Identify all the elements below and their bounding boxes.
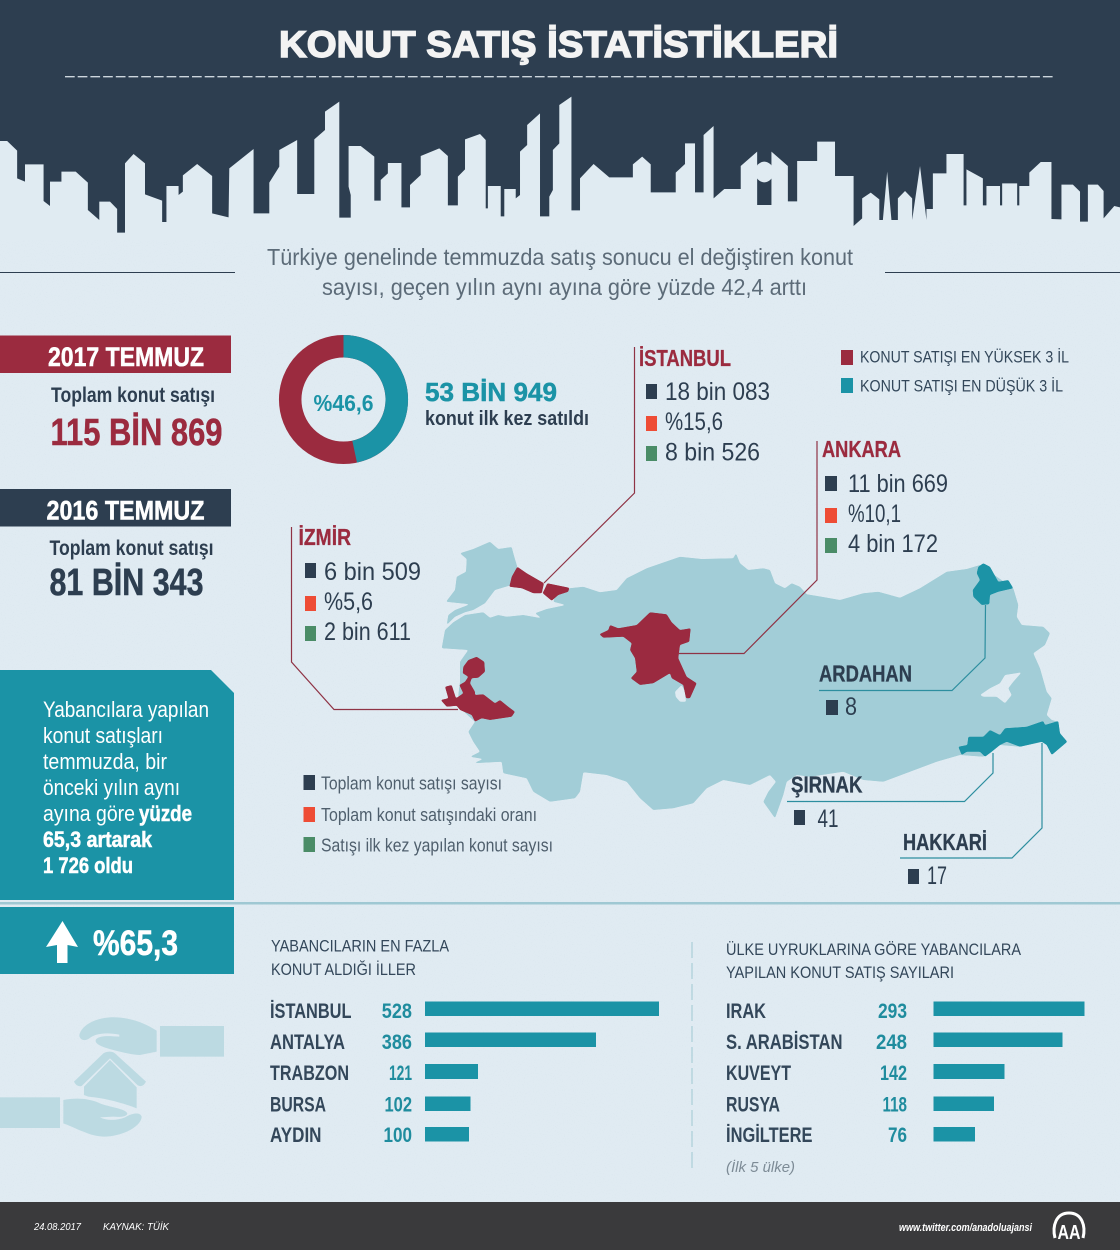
panel: 2017 temmuz [0, 336, 231, 454]
chart: countries [726, 940, 1084, 1176]
donut chart: %46,6 [314, 390, 374, 416]
panel: foreign sales text: temmuzda, bir [43, 749, 167, 774]
donut chart [290, 346, 397, 453]
chart: provinces: ANTALYA [270, 1031, 345, 1054]
chart: provinces: AYDIN [270, 1124, 322, 1147]
callout: istanbul: İSTANBUL [639, 345, 731, 371]
chart: provinces: 121 [389, 1062, 412, 1085]
chart: countries: İNGİLTERE [726, 1124, 812, 1147]
chart: countries: RUSYA [726, 1094, 780, 1116]
province: istanbul [509, 567, 569, 601]
panel: percent increase: %65,3 [93, 924, 178, 963]
chart: countries: (İlk 5 ülke) [726, 1159, 795, 1176]
callout: ardahan [819, 605, 986, 721]
chart: provinces: 386 [382, 1031, 412, 1054]
panel: 2016 temmuz [0, 489, 231, 604]
callout: izmir: %5,6 [324, 588, 373, 616]
panel: foreign sales text [0, 670, 234, 900]
legend: statistics keys [304, 774, 553, 856]
chart: provinces: İSTANBUL [270, 1000, 352, 1023]
legend: highest and lowest provinces: KONUT SATIŞI EN DÜŞÜK 3 İL [860, 376, 1063, 396]
chart: provinces: 100 [384, 1124, 412, 1147]
callout: istanbul: 18 bin 083 [665, 378, 770, 406]
first-time sales text: konut ilk kez satıldı [425, 408, 589, 430]
chart: countries: 248 [876, 1031, 907, 1054]
callout: hakkari: 17 [927, 862, 947, 890]
intro text [267, 244, 854, 300]
chart: provinces: TRABZON [270, 1062, 349, 1085]
title: KONUT SATIŞ İSTATİSTİKLERİ [279, 24, 838, 65]
chart: provinces [270, 936, 659, 1147]
first-time sales text [425, 377, 589, 430]
province: sirnak and hakkari [958, 721, 1067, 757]
chart: countries: S. ARABİSTAN [726, 1031, 842, 1054]
chart: countries: IRAK [726, 1000, 766, 1023]
chart: countries: 76 [888, 1124, 907, 1147]
panel: foreign sales text: 65,3 artarak [43, 827, 153, 852]
legend: statistics keys: Satışı ilk kez yapılan konut sayısı [321, 836, 553, 856]
callout: sirnak: ŞIRNAK [791, 772, 863, 798]
chart: countries: ÜLKE UYRUKLARINA GÖRE YABANCILARA [726, 940, 1022, 959]
callout: istanbul: 8 bin 526 [665, 438, 760, 466]
callout: hakkari: HAKKARİ [903, 829, 987, 855]
chart: countries: KUVEYT [726, 1062, 791, 1085]
map of Turkey [441, 542, 1067, 818]
panel: foreign sales text: önceki yılın aynı [43, 775, 180, 800]
callout: ankara: %10,1 [848, 500, 901, 528]
footer: KAYNAK: TÜİK [103, 1221, 170, 1233]
footer [0, 1202, 1120, 1250]
icon: AA logo [1054, 1213, 1084, 1244]
panel: 2016 temmuz: 81 BİN 343 [50, 562, 204, 604]
panel: foreign sales text: ayına göre [43, 801, 135, 826]
panel: foreign sales text: yüzde [139, 801, 192, 826]
chart: provinces: 528 [382, 1000, 412, 1023]
icon: up arrow [46, 921, 78, 963]
chart: countries: 142 [880, 1062, 907, 1085]
footer: www.twitter.com/anadoluajansi [899, 1222, 1033, 1234]
legend: statistics keys: Toplam konut satışındaki oranı [321, 805, 537, 825]
chart: countries: 293 [878, 1000, 907, 1023]
footer: 24.08.2017 [33, 1222, 81, 1233]
icon: AA logo: AA [1058, 1222, 1080, 1244]
panel: 2016 temmuz: Toplam konut satışı [50, 537, 214, 560]
chart: provinces: YABANCILARIN EN FAZLA [271, 936, 450, 956]
panel: 2017 temmuz: Toplam konut satışı [51, 384, 215, 407]
province: ankara [599, 612, 697, 698]
panel: 2017 temmuz: 2017 TEMMUZ [48, 342, 204, 372]
chart: provinces: 102 [384, 1094, 412, 1116]
callout: izmir [292, 524, 458, 710]
legend: highest and lowest provinces: KONUT SATIŞI EN YÜKSEK 3 İL [860, 348, 1069, 366]
chart: countries: 118 [882, 1094, 907, 1116]
header skyline band [0, 0, 1120, 240]
panel: foreign sales text: konut satışları [43, 723, 163, 748]
legend: highest and lowest provinces [841, 348, 1069, 396]
panel: foreign sales text: Yabancılara yapılan [43, 697, 209, 722]
chart: provinces: KONUT ALDIĞI İLLER [271, 960, 416, 979]
panel: percent increase [0, 907, 234, 974]
panel: foreign sales text: 1 726 oldu [43, 853, 133, 878]
legend: statistics keys: Toplam konut satışı sayısı [321, 774, 502, 794]
callout: istanbul [544, 345, 770, 583]
callout: ardahan: 8 [845, 693, 857, 721]
panel: 2017 temmuz: 115 BİN 869 [50, 412, 222, 454]
province: izmir [441, 657, 515, 722]
callout: ankara: 4 bin 172 [848, 530, 938, 558]
icon: hands holding a house [0, 1017, 224, 1137]
intro text: sayısı, geçen yılın aynı ayına göre yüzde 42,4 arttı [322, 274, 807, 300]
callout: ankara: ANKARA [822, 436, 901, 462]
callout: ardahan: ARDAHAN [819, 660, 912, 686]
chart: provinces: BURSA [270, 1094, 326, 1116]
panel: 2016 temmuz: 2016 TEMMUZ [46, 496, 204, 526]
callout: izmir: 6 bin 509 [324, 558, 421, 586]
intro text: Türkiye genelinde temmuzda satış sonucu el değiştiren konut [267, 244, 854, 270]
callout: izmir: 2 bin 611 [324, 618, 411, 646]
callout: istanbul: %15,6 [665, 408, 723, 436]
province: ardahan [973, 563, 1013, 605]
callout: sirnak: 41 [818, 805, 838, 833]
callout: hakkari [900, 743, 1042, 890]
callout: izmir: İZMİR [298, 524, 351, 550]
first-time sales text: 53 BİN 949 [425, 377, 557, 407]
chart: countries: YAPILAN KONUT SATIŞ SAYILARI [726, 963, 954, 982]
callout: sirnak [787, 753, 993, 833]
callout: ankara [679, 436, 948, 654]
callout: ankara: 11 bin 669 [848, 470, 948, 498]
